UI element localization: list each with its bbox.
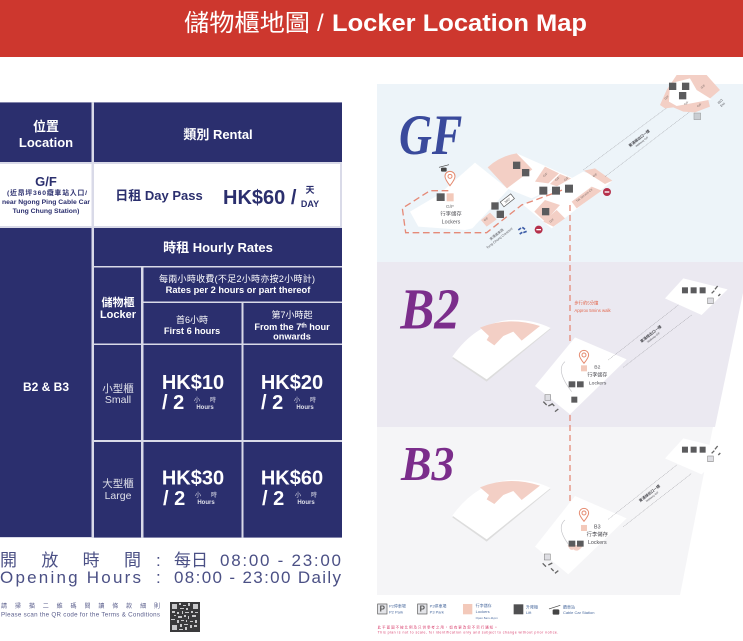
price: large from 7th hour: Hours [297, 500, 315, 506]
rates per 2 hours heading: 每兩小時收費(不足2小時亦按2小時計) [159, 273, 315, 284]
entrance sign [500, 194, 514, 207]
label: B2 lockers: B2 [594, 365, 601, 371]
panel: B3 background [377, 427, 713, 595]
heading: B2: B2 [399, 276, 460, 341]
table header: location [0, 102, 92, 162]
B2 and B3 location cell: B2 & B3 [23, 380, 69, 394]
cable car icon [439, 165, 449, 172]
parking icons [544, 456, 713, 560]
day pass cell: 天 [305, 185, 315, 195]
opening hours [0, 551, 342, 587]
east building [660, 75, 720, 112]
shop labels: G/F [683, 100, 690, 106]
shop labels: G/F [549, 217, 555, 224]
first 6 hours heading: First 6 hours [164, 326, 220, 336]
panel: rental table [0, 102, 342, 538]
label: B3 lockers: Lockers [588, 540, 607, 546]
legend: cable car station: 纜車站 [563, 604, 575, 610]
shop labels: G/F [592, 172, 598, 178]
price: large first 6 hours [144, 442, 242, 538]
price: small first 6 hours: Hours [196, 405, 214, 411]
south building [523, 168, 612, 228]
legend: lift: Lift [526, 610, 532, 615]
label: east stair [716, 97, 726, 108]
day pass cell: HK$60 / [223, 187, 297, 209]
north building [488, 153, 573, 198]
opening hours: 08:00 - 23:00 [220, 551, 341, 570]
locker marker [579, 350, 589, 371]
title banner: 儲物櫃地圖 [184, 10, 310, 37]
legend: lift [514, 604, 538, 615]
parking icon [694, 113, 701, 120]
label: footbridge: 東涌線出口一樓 [638, 483, 661, 503]
G/F location cell: near Ngong Ping Cable Car [2, 199, 90, 206]
west floor [452, 480, 551, 542]
price: large from 7th hour: 小 時 [295, 491, 317, 499]
hourly rates heading: 時租 Hourly Rates [163, 240, 273, 255]
from 7th hour heading: From the 7ᵗʰ hour [254, 322, 330, 332]
legend: P3 park: P3 Park [430, 609, 444, 614]
price: small from 7th hour: HK$20 [261, 372, 323, 394]
B2 and B3 location cell [0, 228, 92, 537]
small locker label [94, 345, 141, 440]
corridor lines [583, 107, 690, 177]
disclaimer: This plan is not to scale, for identification only and subject to change without prior notice. [378, 631, 558, 635]
west floor [452, 320, 551, 382]
legend: P2 park [378, 603, 406, 614]
opening hours: 08:00 - 23:00 Daily [174, 568, 342, 587]
legend: P3 park: P3停車場 [430, 603, 447, 609]
corridor lines [608, 305, 692, 367]
label: G/F lockers [440, 204, 462, 226]
shop labels: G/F [542, 172, 549, 178]
label: east stair: Exit [719, 101, 726, 108]
label: B3 lockers: 行李儲存 [587, 530, 609, 538]
price: small from 7th hour: 小 時 [294, 396, 316, 404]
map: B3 level [378, 438, 728, 635]
price: small from 7th hour: / 2 [261, 392, 283, 414]
locker marker [445, 171, 455, 201]
legend: lockers: Lockers [476, 609, 490, 614]
locker marker [579, 508, 589, 531]
label: G/F lockers: 行李儲存 [440, 209, 462, 217]
shop labels: G/F [554, 176, 561, 182]
circular concourse [561, 520, 572, 548]
legend: P2 park: P [380, 605, 386, 614]
footprint marks [543, 286, 720, 412]
circular concourse [561, 362, 572, 392]
label: walking time [574, 300, 611, 313]
table header: rental: 類別 Rental [183, 127, 253, 142]
hourly rates heading [94, 228, 342, 266]
disclaimer: 此平面圖不按比例及只供參考之用，如有更改恕不另行通知。 [378, 624, 498, 629]
heading: G/F: GF [399, 105, 462, 167]
parking icons [545, 298, 713, 400]
day pass cell: 日租 Day Pass [115, 188, 203, 203]
blue transport icons [518, 227, 527, 234]
shop labels: Tak Service Ctr [575, 187, 594, 203]
label: B2 lockers [587, 365, 607, 386]
legend: lift: 升降機 [526, 604, 538, 610]
shop labels: G/F [483, 216, 489, 222]
legend: cable car station [549, 604, 594, 615]
price: large first 6 hours: / 2 [163, 488, 185, 510]
title banner [0, 0, 743, 57]
price: small first 6 hours: HK$10 [162, 372, 224, 394]
disclaimer [378, 624, 558, 635]
opening hours: : [156, 568, 161, 587]
rates per 2 hours heading: Rates per 2 hours or part thereof [166, 285, 311, 295]
terms note: Please scan the QR code for the Terms & Conditions [1, 612, 160, 618]
east floor [665, 438, 728, 474]
first 6 hours heading: 首6小時 [176, 314, 208, 325]
small locker label: Small [105, 394, 131, 406]
main floor [535, 337, 627, 414]
label: footbridge: 東涌線出口一樓 [627, 128, 651, 148]
label: B2 lockers: Lockers [589, 380, 607, 386]
label: G/F lockers: G/F [446, 204, 454, 210]
shop labels: G/F [696, 102, 703, 108]
opening hours: 開放時間 [0, 551, 141, 570]
shop near entrance [481, 213, 497, 227]
title banner: / [317, 10, 324, 37]
legend: P3 park [418, 603, 447, 614]
heading: B3: B3 [400, 438, 454, 491]
label: footbridge: Walkway G/F [645, 490, 660, 503]
table header: rental [94, 102, 342, 162]
label: footbridge: Walkway G/F [646, 331, 661, 344]
label: footbridge: Walkway G/F [634, 135, 650, 148]
map: B2 level [399, 276, 728, 414]
opening hours: : [156, 551, 161, 570]
table header: location: Location [19, 135, 73, 150]
legend: P2 park: P2 Park [389, 609, 403, 614]
title banner: Locker Location Map [332, 10, 587, 37]
price: small first 6 hours: / 2 [162, 392, 184, 414]
table header: location: 位置 [33, 119, 59, 134]
locker column heading [94, 268, 141, 344]
price: small from 7th hour [244, 345, 342, 440]
price: small from 7th hour: Hours [296, 405, 314, 411]
legend: lockers [463, 602, 498, 620]
price: small first 6 hours: 小 時 [194, 396, 216, 404]
opening hours: 每日 [174, 551, 208, 570]
legend: lockers: Open 8am-11pm [476, 616, 498, 620]
from 7th hour heading: 第7小時起 [271, 309, 313, 320]
west building floor [410, 163, 508, 230]
rates per 2 hours heading [144, 268, 342, 302]
label: B3 lockers [587, 524, 609, 546]
from 7th hour heading: onwards [273, 332, 311, 342]
label: B3 lockers: B3 [594, 524, 601, 530]
terms note [1, 602, 160, 618]
first 6 hours heading [144, 303, 242, 344]
legend: P2 park: P2停車場 [389, 603, 406, 609]
price: large from 7th hour [244, 442, 342, 538]
corridor lines [608, 465, 692, 527]
lift icons [437, 83, 689, 218]
shop labels: G/F [663, 94, 670, 101]
entrance sign: 360° [504, 196, 512, 204]
map: G/F level [399, 75, 726, 250]
day pass cell [94, 164, 340, 226]
large locker label [94, 442, 141, 538]
shop labels [483, 83, 706, 224]
label: walking time: Approx 5mins walk [574, 308, 611, 313]
price: large from 7th hour: HK$60 [261, 468, 323, 490]
price: large first 6 hours: Hours [197, 500, 215, 506]
locker column heading: Locker [100, 309, 137, 321]
large locker label: 大型櫃 [102, 477, 134, 490]
label: B2 lockers: 行李儲存 [587, 371, 607, 378]
terms note: 請掃描二維碼閱讀條款細則 [1, 602, 160, 610]
G/F location cell: (近昂坪360纜車站入口/ [7, 188, 87, 197]
label: Tung Chung Crescent: Tung Chung Crescent [486, 227, 514, 250]
label: G/F lockers: Lockers [442, 220, 461, 226]
legend: lockers: 行李儲存 [476, 602, 492, 608]
panel: B2 background [377, 262, 743, 427]
panel: G/F background [377, 84, 743, 262]
MTR exit marks [535, 188, 611, 234]
east floor [665, 278, 728, 315]
price: large first 6 hours: HK$30 [162, 468, 224, 490]
G/F location cell: Tung Chung Station) [13, 208, 79, 215]
walking route: vertical link [569, 205, 571, 541]
walking route [402, 187, 572, 233]
from 7th hour heading [244, 303, 342, 344]
price: large first 6 hours: 小 時 [195, 491, 217, 499]
legend: cable car station: Cable Car Station [563, 610, 594, 615]
label: east stair: 出口 [716, 97, 724, 105]
G/F location cell: G/F [35, 174, 57, 189]
large locker label: Large [105, 490, 132, 502]
shop labels: G/F [563, 176, 570, 182]
opening hours: Opening Hours [0, 568, 141, 587]
price: large from 7th hour: / 2 [262, 488, 284, 510]
small locker label: 小型櫃 [102, 382, 134, 395]
price: small first 6 hours [144, 345, 242, 440]
legend: P3 park: P [420, 605, 426, 614]
footprint marks [543, 446, 720, 573]
QR code [170, 602, 200, 632]
locker column heading: 儲物櫃 [102, 295, 134, 309]
main floor [535, 496, 627, 574]
label: walking time: 步行約5分鐘 [574, 300, 599, 307]
G/F location cell [0, 164, 92, 226]
lift icons [569, 287, 706, 403]
label: footbridge: 東涌線出口一樓 [639, 324, 663, 344]
shop labels: G/F [700, 83, 706, 90]
label: Tung Chung Crescent: 東涌達東路 [488, 227, 505, 241]
lift icons [568, 447, 706, 551]
day pass cell: DAY [301, 199, 319, 209]
